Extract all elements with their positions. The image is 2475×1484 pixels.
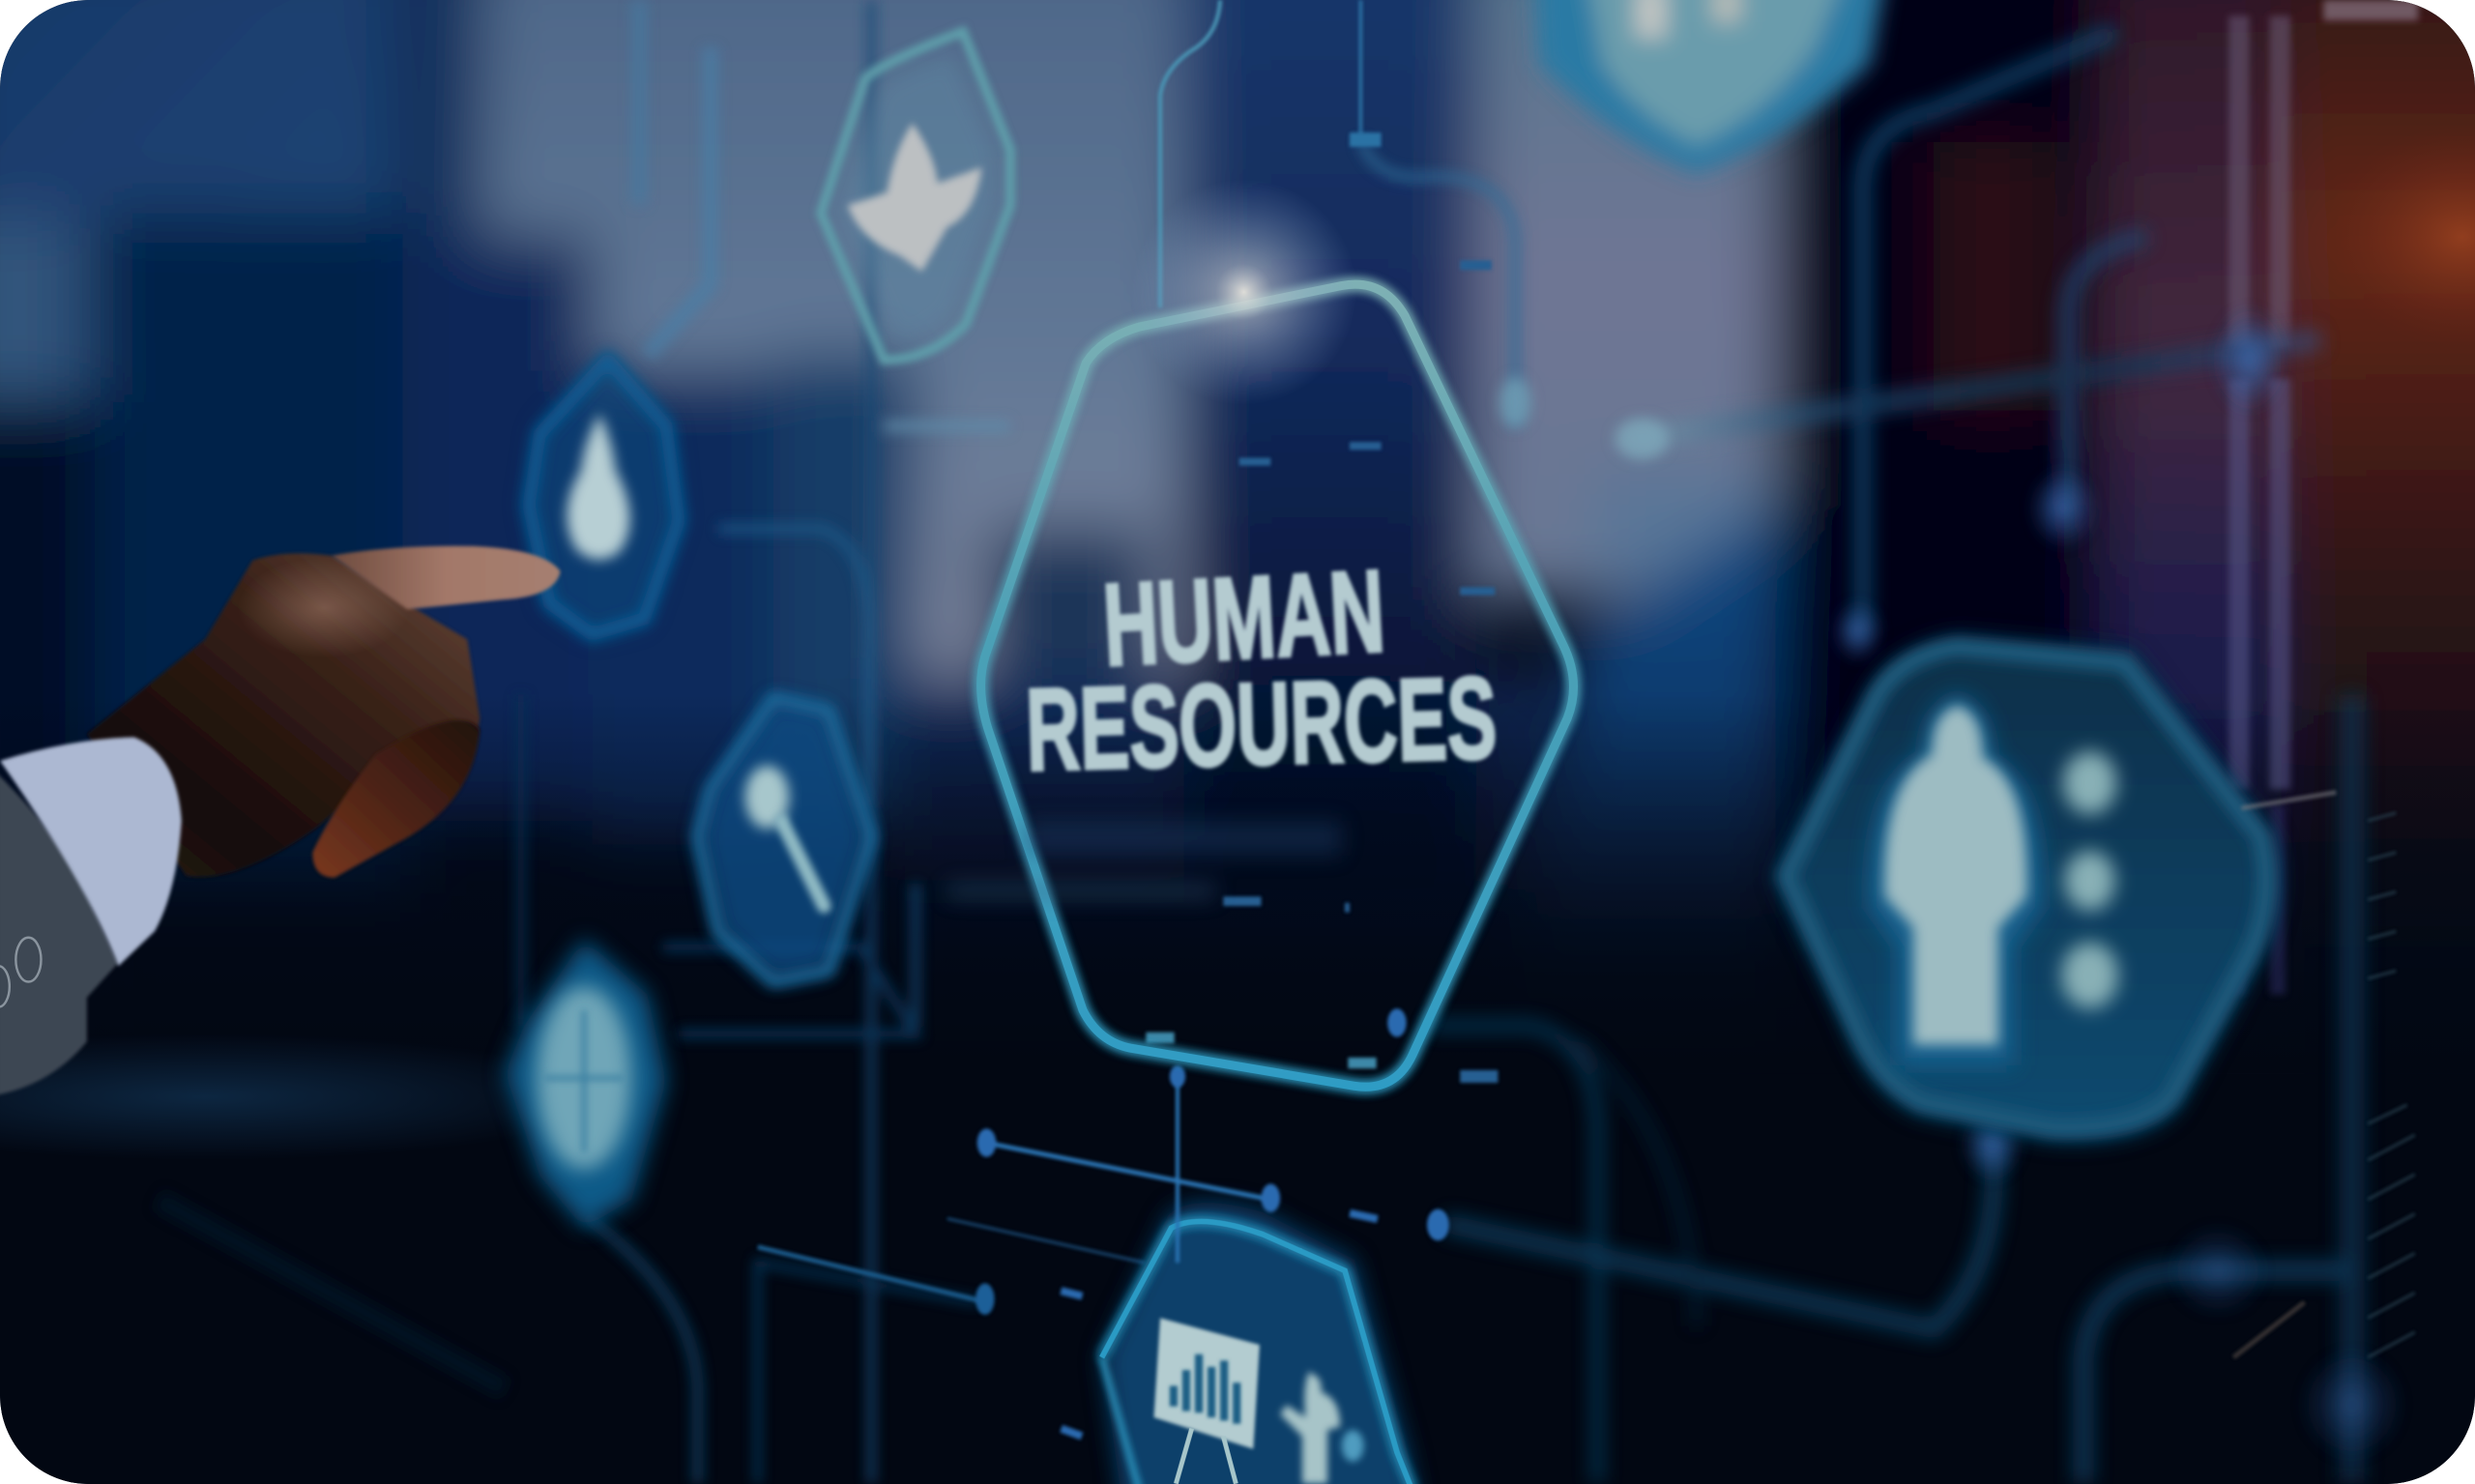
icon: globe hexagon: [505, 939, 666, 1228]
thin teal lines above hexagon: [1160, 0, 1360, 307]
wrist and back of hand: [87, 553, 480, 877]
shirt cuff: [0, 737, 182, 966]
central hexagon outline: [981, 284, 1574, 1087]
connector lines below hexagon: [758, 1073, 1270, 1302]
background: tower window strips: [2228, 0, 2418, 995]
title text: human resources: RESOURCES: [1025, 653, 1499, 796]
curled fingers: [312, 720, 480, 878]
hand pointing: [0, 546, 561, 1097]
icon: pear hexagon: [524, 350, 682, 639]
small dashes inside hexagon: [1146, 132, 1498, 1083]
icon: leaf hexagon: [821, 32, 1010, 360]
background: soft circuit lines: [158, 0, 1515, 1484]
index finger: [332, 546, 561, 609]
background: lower darkness: [67, 723, 2475, 1073]
icon: person hexagon: [1776, 634, 2278, 1140]
icon: magnifier hexagon: [698, 698, 871, 981]
city haze inside hexagon: [947, 821, 1342, 898]
flare above hexagon: [1130, 178, 1357, 406]
right edge ruler ticks: [2233, 793, 2415, 1357]
title text: human resources: HUMAN: [1100, 545, 1387, 690]
background: blurred city scene: [0, 0, 2475, 930]
background: far right circuit lines: [1429, 32, 2352, 1484]
icon: presentation chart hexagon: [1102, 1203, 1420, 1484]
background: forearm haze band: [0, 1045, 510, 1149]
background: lens flare orange: [2369, 156, 2475, 315]
button: [0, 938, 41, 1007]
connector nodes: [975, 1008, 1449, 1440]
knuckle highlight: [237, 557, 411, 658]
icon: top blob hexagon: [1534, 0, 1886, 174]
glowing nodes: [1500, 306, 2405, 1462]
title text: human resources: [1025, 545, 1499, 796]
sleeve: [0, 761, 118, 1097]
